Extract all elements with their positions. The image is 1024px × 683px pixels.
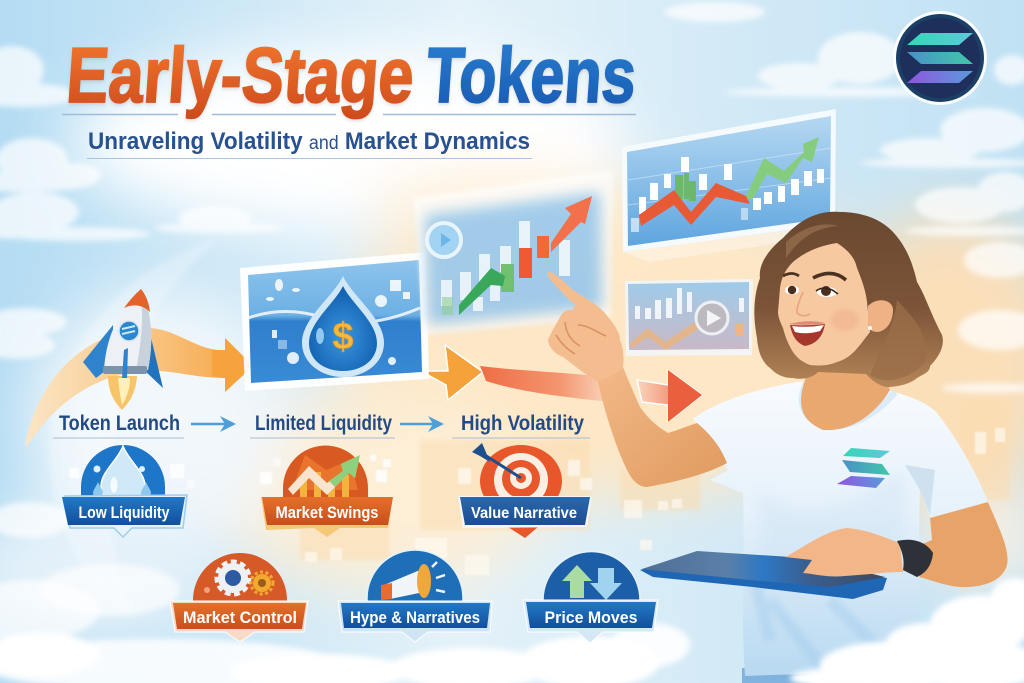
eyes and brows: [783, 273, 846, 297]
title: Tokens: Tokens: [424, 31, 639, 119]
pointing hand: [548, 272, 624, 381]
clouds: foreground bottom right: [790, 578, 1024, 683]
banner: Hype & Narratives: [350, 608, 480, 627]
earring: [868, 326, 872, 330]
banner: Value Narrative: [471, 505, 577, 522]
steps row: [59, 412, 584, 435]
icon: orange dome with rising line: [283, 446, 368, 500]
banner: Low Liquidity: [78, 504, 170, 522]
panel: small chart with play button: [625, 279, 753, 356]
cheek blush: [831, 309, 859, 331]
step: Token Launch: Token Launch: [59, 412, 180, 435]
clouds: upper and left: [0, 2, 1024, 393]
clouds: bottom: [0, 502, 690, 683]
step: Limited Liquidity: Limited Liquidity: [255, 412, 392, 435]
panel: top chart with red and green line: [622, 109, 836, 252]
left arm pointing: [597, 367, 727, 487]
face: [778, 243, 870, 366]
shirt collar and shading: [750, 382, 935, 665]
badge: Market Control: [170, 553, 308, 642]
decorative pixel squares: [69, 455, 592, 490]
arrow: to limited liquidity: [191, 416, 236, 432]
ear: [868, 300, 893, 332]
ribbon arrow: launch to liquidity: [25, 328, 253, 445]
badge: Hype and Narratives: [338, 550, 492, 642]
icon: orange dome with gears: [193, 553, 287, 605]
banner: Price Moves: [544, 608, 638, 627]
badge: Price Moves: [523, 552, 658, 643]
hand on tablet and watch: [785, 528, 933, 577]
right arm: [915, 500, 1008, 587]
title: Early-Stage: Early-Stage: [64, 31, 417, 119]
badge: Value Narrative: [458, 443, 592, 538]
hair back: [754, 212, 943, 387]
shirt logo: [837, 448, 890, 488]
mouth: [789, 321, 826, 346]
icon: dome with up and down arrows: [543, 552, 640, 605]
arrow: into woman: [637, 370, 702, 422]
banner: [338, 601, 492, 642]
hair streak: [870, 300, 926, 380]
icon: rocket: [83, 289, 163, 410]
icon: blue dome with megaphone: [367, 550, 463, 605]
ribbon arrow: liquidity to volatility: [428, 345, 612, 402]
badge: Market Swings: [261, 446, 393, 537]
tablet: [640, 551, 887, 599]
subtitle: Unraveling Volatility and Market Dynamics: [88, 128, 530, 155]
neck: [801, 345, 890, 430]
banner: Market Control: [183, 608, 297, 627]
woman presenter: [548, 212, 1008, 683]
panel: liquidity water: $: [332, 316, 354, 358]
panel: faded candlestick chart: [413, 170, 613, 335]
icon: blue dome with droplets: [81, 445, 165, 507]
arrow: to high volatility: [400, 416, 444, 432]
nose: [797, 292, 810, 316]
banner: Market Swings: [276, 504, 378, 522]
jeans: [742, 668, 812, 683]
title: [64, 31, 639, 119]
step: High Volatility: High Volatility: [461, 412, 584, 435]
icon: target with dart: [472, 443, 562, 538]
hair highlight: [786, 224, 838, 258]
panel: liquidity water: [240, 252, 429, 391]
t-shirt: [693, 380, 988, 676]
logo: Solana badge: [893, 11, 987, 105]
badge: Low Liquidity: [62, 445, 187, 537]
